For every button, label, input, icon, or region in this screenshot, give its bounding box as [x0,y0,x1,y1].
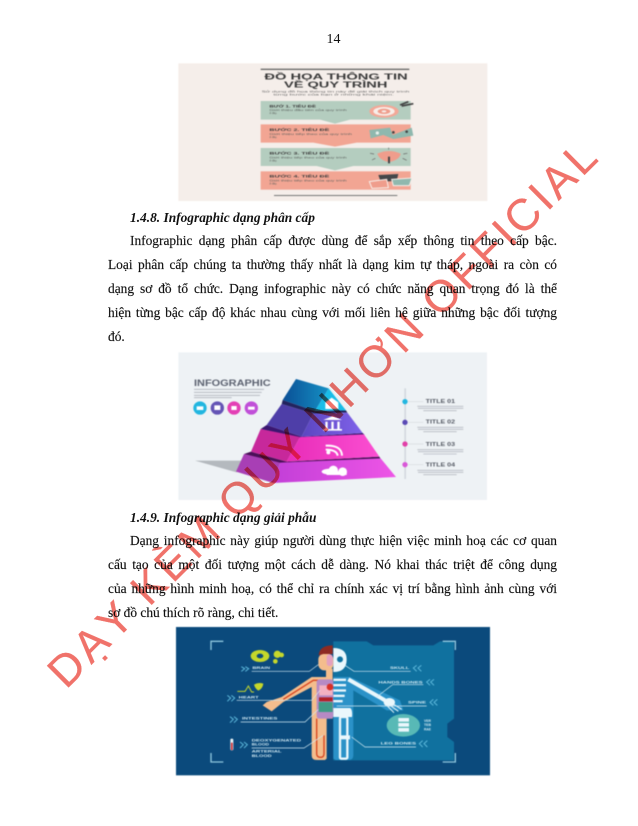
paragraph: hierarchical infographic: dạng sơ đồ tổ chức. Dạng infographic này có chức năng quan trọng đó là thể [108,281,557,296]
infographic: human anatomy: LEG BONES [381,742,417,746]
infographic: process steps: BƯỚC 4. TIÊU ĐỀ [269,173,330,178]
tier 3 [251,429,300,462]
infographic: pyramid: TITLE 02 [426,420,455,426]
page number: 14 [326,32,340,46]
infographic: process steps: ở đây. [269,158,277,162]
paragraph: anatomical infographic [108,533,557,620]
infographic: pyramid: TITLE 03 [426,442,455,448]
infographic: pyramid: TITLE 04 [426,463,456,469]
infographic: pyramid: TITLE 01 [426,399,455,405]
infographic: human anatomy: SKULL [390,666,411,670]
paragraph: anatomical infographic: cấu tạo của một đối tượng một cách dễ dàng. Nó khai thác triệt để công dụng [108,557,557,572]
infographic: process steps: BƯỚC 2. TIÊU ĐỀ [269,127,330,132]
section heading 1.4.8: 1.4.8. Infographic dạng phân cấp [130,210,315,224]
tier 4 [236,454,280,483]
infographic: human anatomy: TEB [424,723,431,727]
infographic: human anatomy [175,626,491,776]
paragraph: hierarchical infographic: Loại phân cấp chúng ta thường thấy nhất là dạng kim tự tháp, ngoài ra còn có [108,257,557,272]
infographic: process steps: ở đây. [269,135,277,139]
infographic: process steps: BƯỚ 1. TIÊU ĐỀ [269,103,316,108]
paragraph: anatomical infographic: sơ đồ chú thích rõ ràng, chi tiết. [108,605,278,620]
infographic: pyramid: INFOGRAPHIC [194,378,271,388]
infographic: process steps: từng bước của bạn ở những khái niệm. [273,92,394,96]
infographic: process steps: VỀ QUY TRÌNH [284,79,388,89]
infographic: process steps: ở đây. [269,111,277,115]
infographic: process steps: BƯỚC 3. TIÊU ĐỀ [269,151,330,156]
infographic: process steps: ĐỒ HỌA THÔNG TIN [264,71,408,81]
paragraph: hierarchical infographic: đó. [108,329,125,344]
infographic: human anatomy: INTESTINES [242,717,278,721]
infographic: human anatomy: DEOXYGENATED [252,738,302,742]
pyramid gap shadows [244,452,381,464]
tier 1 [283,379,329,411]
infographic: human anatomy: HEART [239,695,260,699]
infographic: pyramid [178,352,487,500]
infographic: process steps [178,63,488,201]
leader lines [227,665,437,748]
infographic: human anatomy: RAE [424,727,431,731]
paragraph: hierarchical infographic: Infographic dạng phân cấp được dùng để sắp xếp thông tin theo cấp bậc. [130,233,557,248]
infographic: process steps: Sử dụng đồ họa thông tin này để giải thích quy trình [262,89,410,93]
infographic: human anatomy: ARTERIAL [252,750,283,754]
infographic: human anatomy: SPINE [408,701,427,705]
paragraph: anatomical infographic: Dạng infographic này giúp người dùng thực hiện việc minh hoạ các cơ quan [130,533,557,548]
paragraph: hierarchical infographic: hiện từng bậc cấp độ khác nhau cùng với mối liên hệ giữa những bậc đối tượng [108,305,557,320]
infographic: human anatomy: BLOOD [252,754,272,758]
paragraph: hierarchical infographic [108,233,557,344]
right half skeleton [333,648,347,672]
tier 2 [267,404,313,437]
infographic: process steps: Giới thiệu tiếp theo của quy trình [269,156,347,160]
infographic: human anatomy: BRAIN [252,666,271,670]
paragraph: anatomical infographic: của những hình minh hoạ, có thể chỉ ra chính xác vị trí bằng hình ảnh cùng với [108,581,557,596]
left half of the body [263,677,333,760]
infographic: process steps: ở đây. [269,181,277,185]
infographic: process steps: Giới thiệu tiếp theo của quy trình [269,179,347,183]
infographic: process steps: Giới thiệu đầu tiên của quy trình [269,108,347,112]
infographic: process steps: Giới thiệu tiếp theo của quy trình [269,132,353,136]
watermark: DẠY KÈM QUY NHƠN OFFICIAL [39,132,607,697]
right silhouette [333,677,403,760]
infographic: human anatomy: VER [424,719,431,723]
section heading 1.4.9: 1.4.9. Infographic dạng giải phẫu [130,510,316,524]
infographic: human anatomy: HANDS BONES [378,680,424,684]
infographic: human anatomy: BLOOD [252,743,269,747]
left icons [251,650,269,662]
